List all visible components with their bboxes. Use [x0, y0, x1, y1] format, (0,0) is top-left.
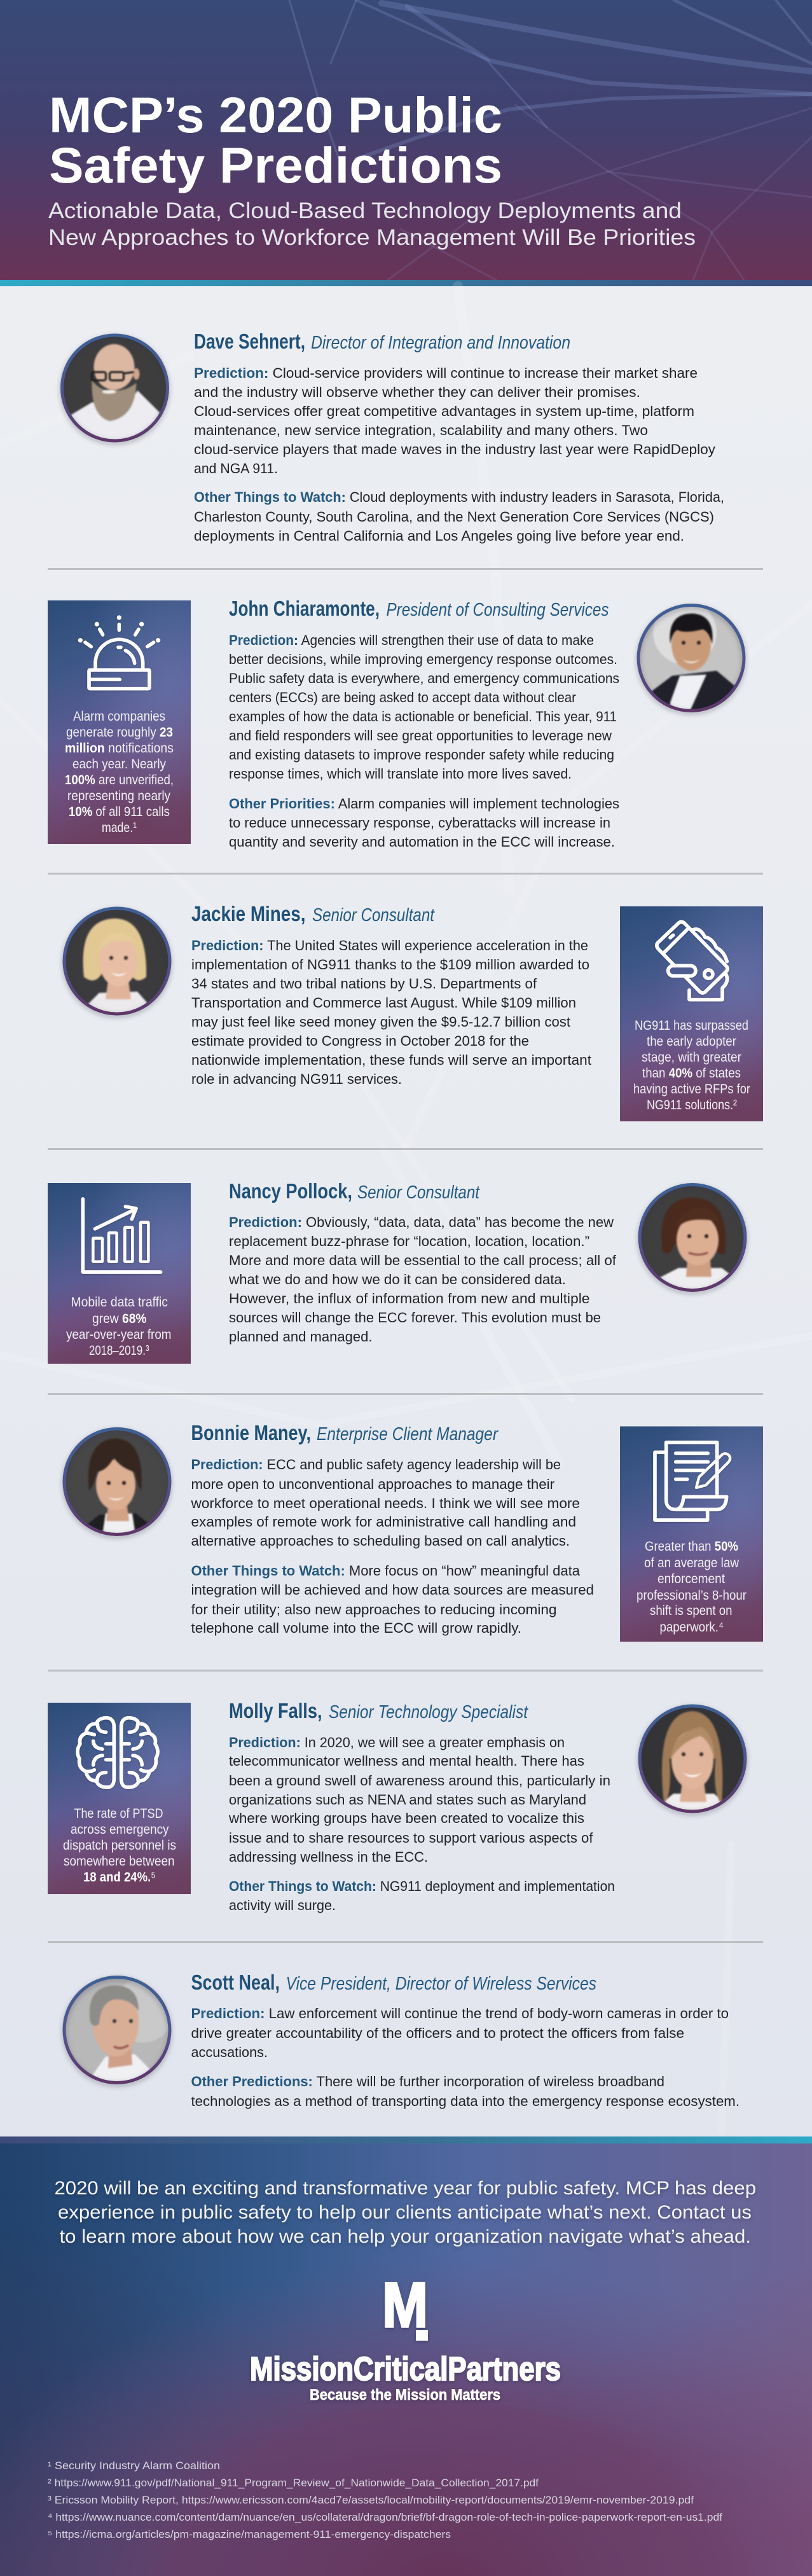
- other things to watch: [229, 1878, 615, 1913]
- prediction text: More and more data will be essential to the call process; all of: [229, 1252, 617, 1268]
- prediction text: sources will change the ECC forever. This evolution must be: [229, 1310, 601, 1326]
- other things to watch: Other Things to Watch: Cloud deployments with industry leaders in Sarasota, Florida,: [194, 489, 724, 505]
- stat text: Alarm companies: [73, 709, 165, 724]
- prediction text: where working groups have been created to vocalize this: [228, 1810, 584, 1826]
- stat text: 2018–2019.³: [89, 1343, 149, 1358]
- stat text: grew 68%: [92, 1311, 146, 1326]
- panel: Jackie Mines: [60, 902, 763, 1121]
- stat text: the early adopter: [647, 1034, 736, 1049]
- prediction text: more open to unconventional approaches to manage their: [191, 1476, 554, 1492]
- footnotes: ⁵ https://icma.org/articles/pm-magazine/management-911-emergency-dispatchers: [48, 2528, 451, 2540]
- prediction text: Transportation and Commerce last August. While $109 million: [191, 995, 576, 1011]
- prediction text: Prediction: Law enforcement will continue the trend of body-worn cameras in order to: [191, 2005, 729, 2021]
- prediction text: 34 states and two tribal nations by U.S. Departments of: [191, 976, 537, 992]
- closing statement: to learn more about how we can help your organization navigate what’s ahead.: [60, 2226, 751, 2247]
- prediction text: organizations such as NENA and states such as Maryland: [229, 1792, 586, 1808]
- portrait: Molly Falls: [635, 1701, 750, 1816]
- other things to watch: Other Things to Watch: NG911 deployment and implementation: [229, 1878, 615, 1894]
- stat text: year-over-year from: [66, 1327, 172, 1342]
- stat text: Greater than 50%: [645, 1539, 738, 1554]
- stat text: million notifications: [65, 740, 174, 756]
- prediction text: replacement buzz-phrase for “location, location, location.”: [229, 1233, 589, 1249]
- panel: John Chiaramonte: [48, 597, 748, 850]
- stat text: somewhere between: [64, 1853, 174, 1869]
- prediction text: response times, which will translate into more lives saved.: [229, 766, 572, 782]
- other things to watch: activity will surge.: [229, 1897, 336, 1913]
- panel: Scott Neal: [60, 1970, 740, 2109]
- name: John Chiaramonte: John Chiaramonte,: [229, 597, 380, 620]
- prediction text: Prediction: Cloud-service providers will continue to increase their market share: [194, 365, 698, 381]
- prediction text: [191, 2005, 729, 2060]
- stat text: having active RFPs for: [633, 1081, 750, 1097]
- portrait: Dave Sehnert: [57, 331, 172, 445]
- stat text: made.¹: [102, 820, 137, 835]
- icon: rising bar chart: [83, 1199, 161, 1272]
- stat text: than 40% of states: [642, 1065, 741, 1081]
- name: Nancy Pollock: Nancy Pollock,: [229, 1179, 352, 1203]
- footnotes: ² https://www.911.gov/pdf/National_911_Program_Review_of_Nationwide_Data_Collection_2017.pdf: [48, 2477, 539, 2489]
- stat text: [66, 1294, 172, 1358]
- prediction text: may just feel like seed money given the $9.5-12.7 billion cost: [191, 1014, 570, 1030]
- closing statement: [55, 2178, 756, 2247]
- other predictions: technologies as a method of transporting data into the emergency response ecosystem.: [191, 2093, 740, 2109]
- prediction text: [228, 1214, 617, 1345]
- name: Scott Neal: Vice President, Director of Wireless Services: [286, 1974, 596, 1994]
- prediction text: nationwide implementation, these funds will serve an important: [191, 1052, 591, 1068]
- logo: Mission Critical Partners: Because the Mission Matters: [310, 2386, 500, 2404]
- other things to watch: Charleston County, South Carolina, and the Next Generation Core Services (NGCS): [194, 509, 714, 525]
- stat card: alarm companies: [48, 600, 191, 844]
- prediction text: role in advancing NG911 services.: [191, 1071, 402, 1087]
- portrait: John Chiaramonte: [634, 600, 748, 715]
- stat text: representing nearly: [67, 788, 170, 803]
- prediction text: [229, 632, 619, 782]
- stat text: [63, 1806, 176, 1885]
- prediction text: planned and managed.: [229, 1329, 373, 1345]
- name: Molly Falls: Molly Falls,: [229, 1699, 322, 1722]
- name: John Chiaramonte: President of Consulting Services: [387, 600, 609, 620]
- name: Jackie Mines: Senior Consultant: [312, 905, 436, 925]
- closing statement: experience in public safety to help our clients anticipate what’s next. Contact us: [58, 2202, 752, 2223]
- stat text: The rate of PTSD: [74, 1806, 163, 1821]
- footnotes: ³ Ericsson Mobility Report, https://www.ericsson.com/4acd7e/assets/local/mobility-report/documents/2019/emr-november-2019.pdf: [48, 2494, 694, 2506]
- other priorities: Other Priorities: Alarm companies will implement technologies: [229, 796, 619, 812]
- closing statement: 2020 will be an exciting and transformative year for public safety. MCP has deep: [55, 2178, 756, 2199]
- name: Nancy Pollock: [229, 1179, 481, 1203]
- icon: hand holding phone: [657, 922, 727, 1000]
- prediction text: and field responders will see great opportunities to leverage new: [229, 728, 612, 744]
- other things to watch: [191, 1563, 594, 1636]
- logo: Mission Critical Partners: MissionCriticalPartners: [250, 2351, 561, 2388]
- prediction text: estimate provided to Congress in October 2018 for the: [191, 1033, 529, 1049]
- accent bar bottom: [0, 2136, 812, 2143]
- footnotes: ¹ Security Industry Alarm Coalition: [48, 2460, 220, 2472]
- prediction text: telecommunicator wellness and mental health. There has: [229, 1753, 584, 1769]
- other things to watch: telephone call volume into the ECC will grow rapidly.: [191, 1620, 521, 1636]
- name: Scott Neal: [191, 1970, 596, 1994]
- logo: Mission Critical Partners: M: [382, 2269, 428, 2340]
- stat text: professional’s 8-hour: [637, 1588, 747, 1603]
- stat text: across emergency: [71, 1822, 169, 1837]
- icon: document and pen: [655, 1443, 730, 1520]
- name: Bonnie Maney: [191, 1421, 499, 1444]
- portrait: Nancy Pollock: [635, 1181, 750, 1295]
- prediction text: better decisions, while improving emergency response outcomes.: [229, 651, 617, 667]
- stat text: dispatch personnel is: [63, 1838, 176, 1853]
- prediction text: [190, 1457, 580, 1549]
- name: Jackie Mines: [191, 902, 436, 925]
- title: Safety Predictions: [49, 137, 502, 193]
- prediction text: [191, 938, 591, 1087]
- prediction text: and NGA 911.: [194, 460, 278, 476]
- prediction text: workforce to meet operational needs. I think we will see more: [190, 1495, 580, 1511]
- header banner: [0, 0, 812, 280]
- panel: Molly Falls: [48, 1699, 750, 1913]
- prediction text: Prediction: The United States will experience acceleration in the: [191, 938, 588, 953]
- name: Jackie Mines: Jackie Mines,: [191, 902, 305, 925]
- stat text: of an average law: [644, 1555, 739, 1570]
- other things to watch: Other Things to Watch: More focus on “how” meaningful data: [191, 1563, 581, 1579]
- portrait: Bonnie Maney: [60, 1425, 174, 1539]
- main light background: [0, 286, 812, 2137]
- other predictions: [191, 2074, 740, 2109]
- title: MCP’s 2020 Public: [49, 87, 502, 143]
- stat card: PTSD: [48, 1703, 191, 1894]
- prediction text: Prediction: Agencies will strengthen their use of data to make: [229, 632, 594, 648]
- stat card: NG911: [620, 906, 763, 1121]
- prediction text: alternative approaches to scheduling based on call analytics.: [191, 1533, 570, 1549]
- other things to watch: [194, 489, 724, 544]
- other things to watch: integration will be achieved and how data sources are measured: [191, 1582, 594, 1598]
- footnotes: [48, 2460, 722, 2540]
- name: Dave Sehnert: Dave Sehnert,: [194, 329, 305, 353]
- prediction text: Public safety data is everywhere, and emergency communications: [229, 670, 619, 686]
- name: Nancy Pollock: Senior Consultant: [357, 1182, 481, 1203]
- logo: Mission Critical Partners: [250, 2269, 561, 2404]
- name: Dave Sehnert: [194, 329, 570, 353]
- stat text: 100% are unverified,: [65, 772, 174, 787]
- prediction text: what we do and how we do it can be considered data.: [228, 1271, 566, 1287]
- prediction text: addressing wellness in the ECC.: [229, 1849, 428, 1865]
- footer panel: [0, 2136, 812, 2576]
- stat text: [65, 709, 174, 835]
- subtitle: Actionable Data, Cloud-Based Technology Deployments and: [48, 198, 682, 223]
- stat text: NG911 has surpassed: [635, 1018, 748, 1033]
- name: Molly Falls: [229, 1699, 529, 1722]
- subtitle: [48, 198, 696, 250]
- stat text: 18 and 24%.⁵: [83, 1869, 156, 1885]
- footnotes: ⁴ https://www.nuance.com/content/dam/nuance/en_us/collateral/dragon/brief/bf-dragon-role-of-tech-in-police-paperwork-report-en-us1.pdf: [48, 2511, 722, 2523]
- stat text: each year. Nearly: [72, 756, 166, 772]
- prediction text: [228, 1735, 610, 1865]
- prediction text: implementation of NG911 thanks to the $109 million awarded to: [191, 957, 589, 973]
- prediction text: examples of how the data is actionable or beneficial. This year, 911: [229, 709, 617, 724]
- prediction text: Prediction: Obviously, “data, data, data” has become the new: [229, 1214, 614, 1230]
- other things to watch: for their utility; also new approaches to reducing incoming: [191, 1602, 557, 1617]
- other priorities: quantity and severity and automation in the ECC will increase.: [229, 834, 615, 850]
- name: Molly Falls: Senior Technology Specialist: [329, 1702, 529, 1722]
- name: Scott Neal: Scott Neal,: [191, 1970, 280, 1994]
- prediction text: been a ground swell of awareness around this, particularly in: [229, 1773, 610, 1789]
- stat card: mobile data traffic: [48, 1183, 191, 1364]
- stat text: paperwork.⁴: [660, 1619, 724, 1635]
- icon: brain: [78, 1718, 158, 1787]
- name: Bonnie Maney: Enterprise Client Manager: [317, 1424, 499, 1444]
- other predictions: Other Predictions: There will be further incorporation of wireless broadband: [191, 2074, 664, 2089]
- stat text: NG911 solutions.²: [647, 1097, 737, 1112]
- prediction text: and the industry will observe whether they can deliver their promises.: [194, 384, 640, 400]
- stat text: shift is spent on: [650, 1603, 733, 1618]
- prediction text: Cloud-services offer great competitive advantages in system up-time, platform: [194, 403, 694, 419]
- other priorities: to reduce unnecessary response, cyberattacks will increase in: [229, 815, 610, 831]
- prediction text: centers (ECCs) are being asked to accept data without clear: [229, 689, 576, 705]
- prediction text: Prediction: In 2020, we will see a greater emphasis on: [229, 1735, 565, 1750]
- prediction text: However, the influx of information from new and multiple: [229, 1291, 590, 1306]
- stat text: [637, 1539, 747, 1635]
- accent bar top: [0, 280, 812, 286]
- stat text: Mobile data traffic: [71, 1294, 168, 1310]
- stat text: generate roughly 23: [66, 724, 173, 740]
- stat text: enforcement: [657, 1571, 725, 1586]
- subtitle: New Approaches to Workforce Management Will Be Priorities: [48, 225, 696, 250]
- stat text: 10% of all 911 calls: [69, 804, 170, 819]
- stat card: paperwork: [620, 1426, 763, 1642]
- portrait: Scott Neal: [60, 1973, 174, 2088]
- title: [49, 87, 502, 193]
- panel: Nancy Pollock: [48, 1179, 750, 1364]
- prediction text: Prediction: ECC and public safety agency leadership will be: [191, 1457, 561, 1472]
- icon: alarm light: [78, 615, 160, 689]
- name: Dave Sehnert: Director of Integration and Innovation: [311, 333, 570, 353]
- stat text: stage, with greater: [642, 1049, 741, 1065]
- prediction text: [194, 365, 715, 476]
- name: John Chiaramonte: [229, 597, 609, 620]
- stat text: [633, 1018, 750, 1112]
- prediction text: examples of remote work for administrative call handling and: [191, 1514, 576, 1530]
- other things to watch: deployments in Central California and Los Angeles going live before year end.: [194, 528, 684, 544]
- prediction text: drive greater accountability of the officers and to protect the officers from false: [191, 2025, 684, 2041]
- prediction text: accusations.: [191, 2044, 268, 2060]
- name: Bonnie Maney: Bonnie Maney,: [191, 1421, 311, 1444]
- panel: Bonnie Maney: [60, 1421, 763, 1642]
- prediction text: and existing datasets to improve responder safety while reducing: [229, 747, 614, 763]
- panel: Dave Sehnert: [57, 329, 724, 544]
- divider lines: [48, 568, 763, 1943]
- prediction text: maintenance, new service integration, scalability and many others. Two: [194, 422, 648, 438]
- other priorities: [229, 796, 619, 850]
- prediction text: issue and to share resources to support various aspects of: [229, 1830, 593, 1846]
- prediction text: cloud-service players that made waves in the industry last year were RapidDeploy: [194, 441, 715, 457]
- portrait: Jackie Mines: [60, 904, 174, 1018]
